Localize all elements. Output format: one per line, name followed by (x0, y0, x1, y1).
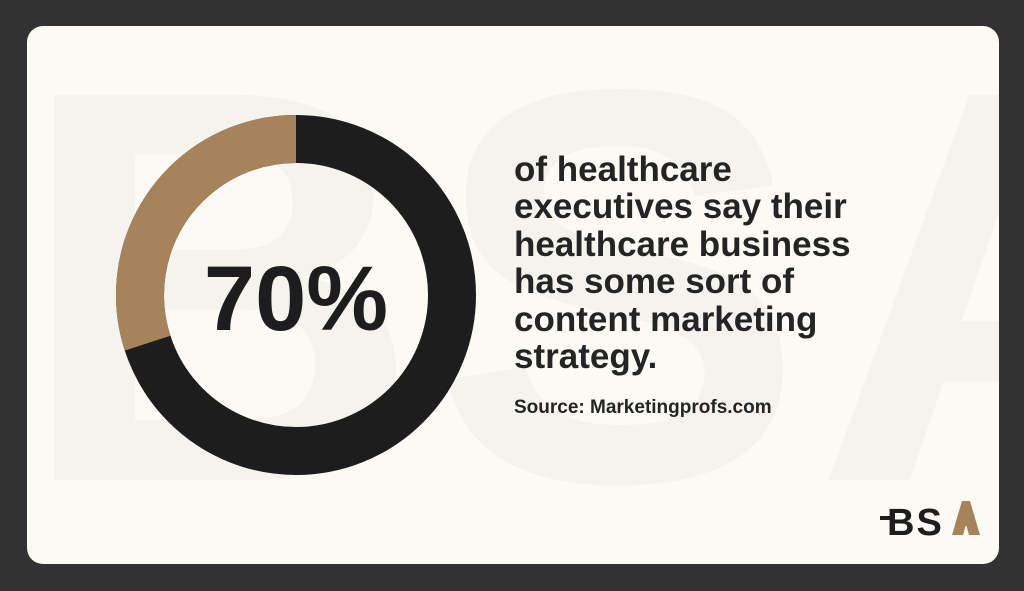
statement text (514, 150, 851, 376)
statement text: has some sort of (514, 262, 794, 301)
statement text: strategy. (514, 337, 657, 376)
statement text: executives say their (514, 187, 847, 226)
donut chart 70%: 70% (204, 248, 388, 350)
logo BSA (880, 501, 980, 537)
source: Source: Marketingprofs.com (514, 397, 772, 418)
statement text: of healthcare (514, 150, 732, 189)
statement text: content marketing (514, 300, 817, 339)
statement text: healthcare business (514, 225, 851, 264)
